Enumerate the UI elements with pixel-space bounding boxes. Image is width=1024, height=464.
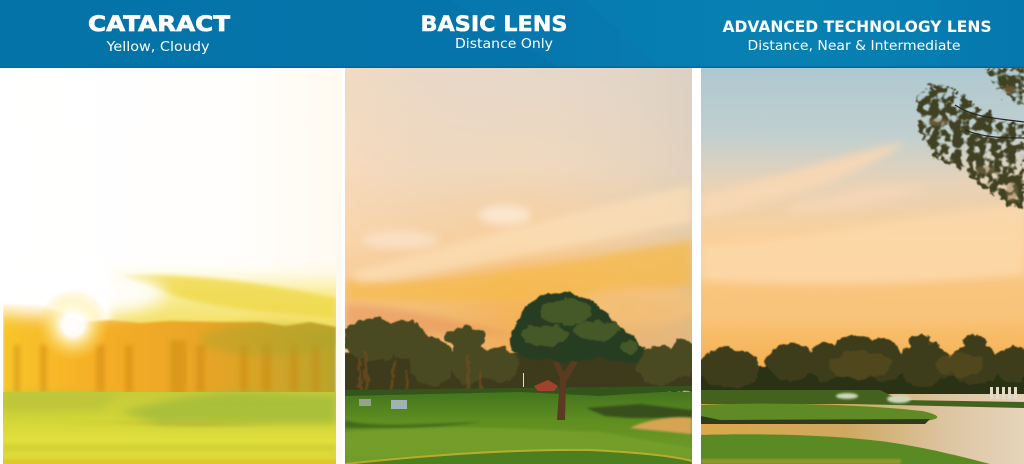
advanced lens treeline bbox=[701, 333, 1024, 394]
flag bbox=[523, 373, 524, 387]
heading: basic lens: Distance Only bbox=[455, 37, 553, 52]
heading: cataract: CATARACT bbox=[88, 12, 231, 36]
header banner bbox=[0, 0, 1024, 68]
large pine tree bbox=[510, 293, 644, 420]
advanced lens sky bbox=[701, 68, 1024, 368]
foreground green bbox=[701, 434, 990, 464]
white columns bbox=[990, 387, 1017, 399]
panel: basic lens view bbox=[345, 68, 692, 464]
heading: advanced technology lens: ADVANCED TECHNOLOGY LENS bbox=[722, 17, 992, 36]
cataract sky bbox=[282, 68, 342, 464]
fountains bbox=[836, 393, 911, 403]
pond bbox=[586, 404, 692, 418]
advanced lens water bbox=[701, 394, 1024, 464]
island green bbox=[701, 404, 937, 422]
heading: cataract bbox=[88, 12, 231, 55]
sun glare bbox=[0, 269, 165, 361]
advanced lens clouds bbox=[701, 141, 1024, 286]
basic lens clouds bbox=[345, 185, 700, 335]
heading: cataract: Yellow, Cloudy bbox=[105, 40, 210, 55]
panel: cataract view bbox=[0, 68, 350, 464]
heading: basic lens: BASIC LENS bbox=[420, 12, 568, 36]
basic lens sky bbox=[345, 68, 692, 398]
basic lens fairway bbox=[345, 392, 692, 464]
golf carts bbox=[359, 399, 371, 406]
panel: advanced technology lens view bbox=[681, 68, 1024, 464]
cataract treeline bbox=[3, 304, 336, 398]
distant green bbox=[701, 390, 1024, 408]
pavilion bbox=[534, 380, 558, 391]
heading: basic lens bbox=[420, 12, 568, 52]
cataract fairway bbox=[3, 392, 336, 464]
heading: advanced technology lens: Distance, Near & Intermediate bbox=[748, 39, 960, 54]
pine branch bbox=[917, 68, 1024, 212]
heading: advanced technology lens bbox=[722, 17, 992, 54]
basic lens treeline bbox=[345, 316, 692, 392]
cataract haze band bbox=[3, 262, 350, 464]
